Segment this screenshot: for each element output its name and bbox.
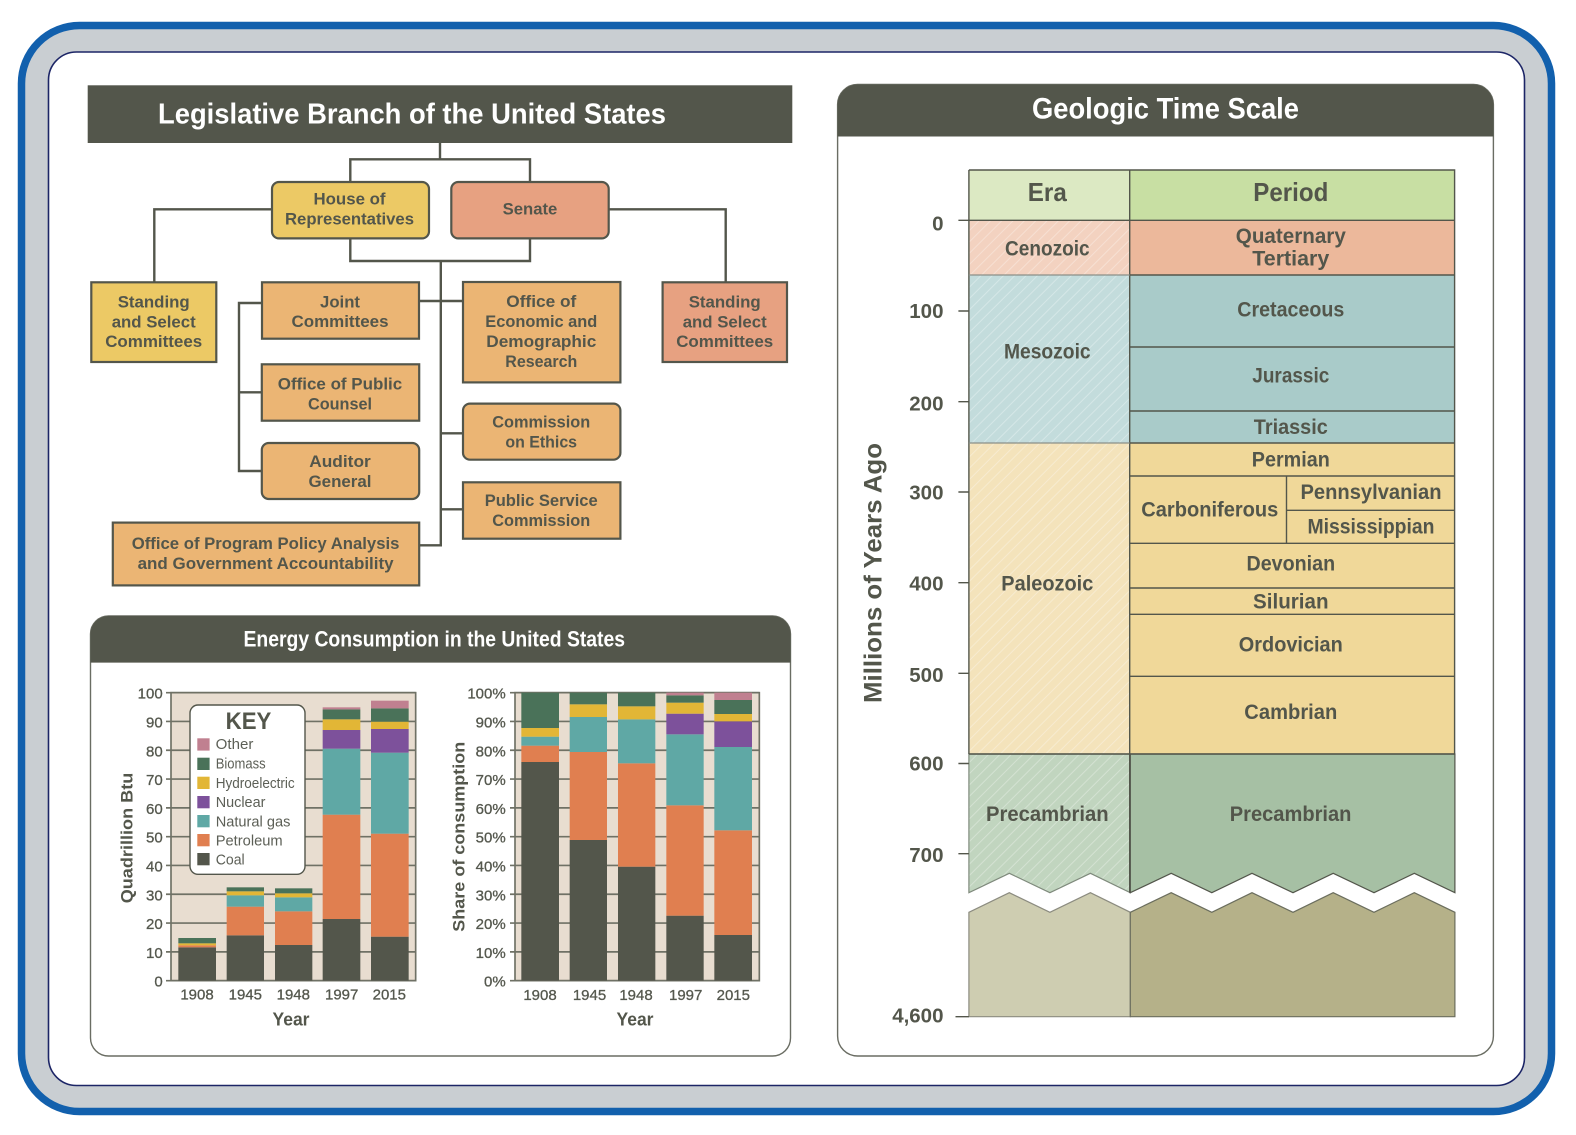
era: Mesozoic: Mesozoic (1004, 340, 1091, 363)
period: Carboniferous: Mississippian (1308, 515, 1434, 538)
axis ticks (956, 220, 969, 1017)
box: Office of Public Counsel (262, 364, 419, 421)
period: Permian: Permian (1252, 449, 1330, 472)
y axis numbers: 70 (146, 772, 163, 789)
x axis years: 2015 (373, 986, 406, 1003)
box: Commission on Ethics: on Ethics (505, 433, 577, 452)
box: Office of Economic and Demographic Research: Research (505, 352, 577, 371)
box: House standing and select committees: Committees (105, 332, 202, 351)
x axis years: 1945 (573, 987, 606, 1004)
y axis percents: 60% (476, 801, 506, 818)
bar: 1948 share (618, 693, 655, 981)
axis numbers (892, 212, 944, 1028)
era header: Era (1028, 177, 1067, 207)
period: Cretaceous: Cretaceous (1237, 299, 1344, 322)
bars (178, 701, 409, 981)
bar: 1945 (227, 887, 264, 981)
box: House of Representatives: House of (314, 190, 386, 209)
axis numbers: 600 (909, 752, 944, 776)
axis numbers: 700 (909, 844, 944, 867)
axis numbers: 100 (909, 300, 944, 323)
period: Carboniferous: Carboniferous (1141, 499, 1278, 522)
era: Mesozoic (969, 275, 1130, 443)
x axis title: Year (272, 1010, 310, 1030)
period: Ordovician: Ordovician (1239, 634, 1343, 657)
box: Joint Committees (262, 282, 419, 339)
y axis numbers: 50 (146, 830, 163, 847)
period header (1130, 170, 1455, 220)
box: House of Representatives (272, 182, 429, 238)
heading: legislative branch (88, 85, 792, 143)
box: Joint Committees: Committees (292, 312, 388, 331)
heading: legislative branch: Legislative Branch of the United States (158, 98, 666, 130)
era column (969, 170, 1130, 1017)
era: Paleozoic (969, 443, 1130, 754)
period: Devonian (1130, 543, 1455, 588)
x axis years: 2015 (717, 987, 750, 1004)
period: Triassic: Triassic (1254, 416, 1328, 439)
bar: 1997 (323, 707, 360, 981)
y axis percents: 20% (476, 916, 506, 933)
heading: energy consumption: Energy Consumption in the United States (244, 627, 625, 652)
box: Office of Economic and Demographic Research: Office of (506, 292, 577, 311)
y axis percents: 10% (476, 945, 506, 962)
box: Auditor General (262, 443, 419, 499)
box: Joint Committees: Joint (320, 292, 360, 311)
period: Quaternary and Tertiary: Tertiary (1252, 248, 1330, 271)
box: Office of Economic and Demographic Research: Demographic (486, 332, 596, 351)
period: Permian (1130, 443, 1455, 476)
legend key: Coal (216, 852, 245, 869)
box: Public Service Commission: Public Service (485, 491, 598, 510)
bar: 1908 (178, 938, 216, 981)
legend key: KEY (226, 708, 271, 735)
legend key (190, 705, 305, 874)
period: Cambrian (1130, 676, 1455, 754)
period: lower segment (1130, 893, 1455, 1017)
era: Precambrian (969, 754, 1130, 893)
period: Ordovician (1130, 614, 1455, 676)
y axis percents: 80% (476, 743, 506, 760)
plot background and grid (510, 693, 759, 981)
x axis years: 1948 (277, 986, 310, 1003)
axis numbers: 200 (909, 392, 944, 416)
box: House standing and select committees (91, 282, 216, 362)
legend key: Nuclear (216, 794, 265, 811)
axis numbers: 0 (932, 212, 944, 236)
table rules (969, 170, 1455, 893)
panel: energy consumption (90, 616, 790, 1056)
period header: Period (1253, 177, 1328, 207)
box: House standing and select committees: Standing (118, 292, 190, 311)
connector lines (154, 143, 726, 545)
y axis percents: 0% (484, 974, 506, 991)
box: Office of Program Policy Analysis and Government Accountability (113, 523, 419, 585)
era: Paleozoic: Paleozoic (1001, 573, 1094, 596)
panel: geologic time scale (838, 84, 1493, 1056)
box: Office of Program Policy Analysis and Government Accountability: Office of Program Policy Analysis (132, 534, 399, 553)
era: Cenozoic: Cenozoic (1005, 238, 1090, 261)
box: Senate standing and select committees: and Select (683, 312, 767, 331)
box: Auditor General: Auditor (309, 452, 371, 471)
heading: energy consumption (90, 616, 790, 663)
x axis years: 1945 (229, 986, 262, 1003)
y axis title: Share of consumption (450, 742, 468, 932)
bar: 1945 share (570, 693, 607, 981)
box: Senate standing and select committees: Committees (676, 332, 773, 351)
box: House of Representatives: Representatives (285, 210, 414, 229)
panel: legislative branch org chart (88, 85, 792, 585)
era: Precambrian: Precambrian (986, 803, 1109, 826)
period: Precambrian (1130, 754, 1455, 893)
y axis numbers: 10 (146, 945, 163, 962)
box: Commission on Ethics: Commission (492, 413, 590, 432)
legend key: Petroleum (216, 833, 283, 850)
axis title: Millions of Years Ago (860, 443, 888, 703)
x axis years (180, 986, 406, 1003)
panel body (90, 616, 790, 1056)
period: Triassic (1130, 411, 1455, 443)
chart: share of consumption stacked bars (450, 686, 759, 1030)
y axis title: Quadrillion Btu (118, 773, 136, 903)
plot background and grid (166, 693, 416, 981)
box: Commission on Ethics (463, 404, 620, 460)
box: Senate (451, 182, 609, 238)
chart: quadrillion Btu stacked bars (118, 686, 416, 1030)
y axis numbers: 0 (154, 974, 163, 991)
period: Cambrian: Cambrian (1244, 701, 1337, 724)
box: Public Service Commission (463, 482, 620, 539)
panel body (838, 84, 1493, 1056)
x axis years (523, 987, 750, 1004)
box: Office of Economic and Demographic Research: Economic and (485, 312, 597, 331)
box: Senate standing and select committees (663, 282, 787, 362)
y axis numbers: 20 (146, 916, 163, 933)
era: lower segment (969, 893, 1130, 1017)
period: Silurian (1130, 588, 1455, 614)
y axis percents: 30% (476, 887, 506, 904)
legend key: Other (216, 736, 253, 753)
era header (969, 170, 1130, 220)
x axis years: 1997 (669, 987, 702, 1004)
period: Quaternary and Tertiary: Quaternary (1236, 225, 1346, 248)
legend key: Natural gas (216, 813, 290, 830)
heading: geologic time scale: Geologic Time Scale (1032, 92, 1299, 126)
period: Cretaceous (1130, 275, 1455, 347)
box: Office of Program Policy Analysis and Government Accountability: and Government Accountability (138, 554, 394, 573)
y axis percents (467, 686, 506, 991)
x axis years: 1997 (325, 986, 358, 1003)
box: Office of Economic and Demographic Research (463, 282, 620, 382)
y axis numbers: 100 (138, 686, 163, 703)
y axis numbers: 80 (146, 743, 163, 760)
y axis numbers (138, 686, 163, 991)
period: Jurassic (1130, 347, 1455, 411)
y axis numbers: 60 (146, 801, 163, 818)
legend key: Hydroelectric (216, 775, 295, 792)
box: Senate: Senate (503, 199, 557, 218)
bar: 1948 (275, 888, 312, 981)
y axis percents: 40% (476, 858, 506, 876)
box: Senate standing and select committees: Standing (689, 292, 761, 311)
y axis percents: 50% (476, 830, 506, 847)
bar: 1908 share (521, 693, 559, 981)
era: Cenozoic (969, 220, 1130, 275)
axis numbers: 500 (909, 664, 944, 687)
x axis years: 1908 (523, 987, 557, 1004)
bar: 2015 (371, 701, 409, 981)
y axis percents: 70% (476, 772, 506, 789)
box: Office of Public Counsel: Office of Public (278, 375, 402, 394)
axis numbers: 4,600 (892, 1004, 944, 1028)
y axis numbers: 30 (146, 887, 163, 904)
bars (521, 693, 752, 981)
bar: 2015 share (714, 693, 752, 981)
x axis years: 1908 (180, 986, 214, 1003)
axis numbers: 300 (909, 482, 944, 504)
box: Public Service Commission: Commission (492, 511, 590, 530)
period: Jurassic: Jurassic (1252, 364, 1330, 387)
x axis years: 1948 (619, 987, 653, 1004)
legend key: Biomass (216, 755, 266, 772)
y axis percents: 90% (476, 714, 506, 732)
age axis (860, 212, 969, 1028)
y axis numbers: 40 (146, 858, 163, 876)
axis numbers: 400 (909, 572, 944, 596)
period: Carboniferous: Pennsylvanian (1300, 481, 1442, 504)
heading: geologic time scale (838, 84, 1493, 136)
period: Devonian: Devonian (1246, 553, 1335, 576)
period: Precambrian: Precambrian (1230, 803, 1351, 826)
box: House standing and select committees: and Select (112, 312, 196, 331)
x axis title: Year (616, 1010, 654, 1030)
y axis percents: 100% (467, 686, 506, 703)
bar: 1997 share (666, 693, 704, 981)
period: Carboniferous (1130, 476, 1455, 543)
period column (1130, 170, 1455, 1017)
box: Auditor General: General (308, 472, 372, 491)
y axis numbers: 90 (146, 714, 163, 732)
period: Quaternary and Tertiary (1130, 220, 1455, 275)
period: Silurian: Silurian (1253, 591, 1329, 614)
box: Office of Public Counsel: Counsel (308, 395, 372, 414)
